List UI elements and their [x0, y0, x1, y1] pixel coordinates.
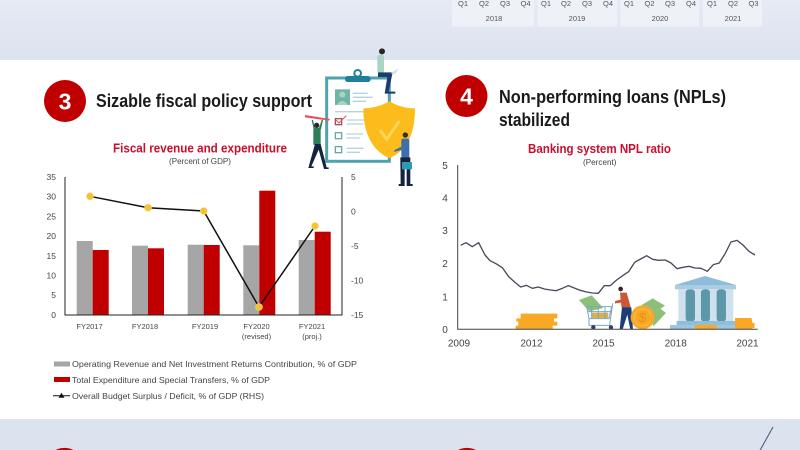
- chart title: Fiscal revenue and expenditure: [113, 142, 287, 156]
- x axis labels: FY2021: [299, 322, 325, 331]
- top band: [0, 0, 800, 60]
- y axis labels: [442, 161, 448, 336]
- chart subtitle: (Percent of GDP): [169, 157, 231, 166]
- left axis labels: [47, 172, 56, 320]
- chart axes: [65, 177, 342, 315]
- legend: [53, 359, 357, 401]
- x axis labels: [76, 322, 325, 341]
- x axis labels: (proj.): [302, 332, 322, 341]
- x axis labels: (revised): [242, 332, 272, 341]
- right axis labels: 0: [351, 206, 356, 216]
- left axis labels: 5: [51, 290, 56, 300]
- right axis labels: -5: [351, 241, 359, 251]
- y axis labels: 5: [442, 161, 448, 172]
- x axis labels: 2012: [520, 338, 543, 350]
- y axis labels: 0: [442, 325, 448, 336]
- heading: section 3: Sizable fiscal policy support: [96, 91, 312, 111]
- y axis labels: 4: [442, 194, 448, 205]
- right axis labels: -15: [351, 310, 364, 320]
- bars: operating revenue: [77, 240, 315, 315]
- line: budget balance: [86, 193, 318, 310]
- illustration: shopper with cart and coin: $: [639, 310, 647, 325]
- x axis labels: FY2019: [192, 322, 218, 331]
- illustration: coin stack left: [516, 314, 557, 329]
- number badge 4: 4: [460, 84, 473, 110]
- illustration: bank building: [670, 276, 740, 329]
- chart: banking system NPL ratio: [442, 142, 759, 350]
- heading: section 4: stabilized: [499, 110, 570, 130]
- x axis labels: 2021: [736, 338, 759, 350]
- number badge 4: [446, 75, 488, 117]
- quarterly axis table: 2021: [725, 14, 741, 23]
- quarterly axis table: 2020: [652, 14, 668, 23]
- legend: Overall Budget Surplus / Deficit, % of GDP (RHS): [72, 391, 264, 401]
- chart title: Banking system NPL ratio: [528, 142, 671, 156]
- x axis labels: FY2020: [243, 322, 270, 331]
- left axis labels: 20: [47, 231, 56, 241]
- left axis labels: 10: [47, 270, 56, 280]
- illustration: coin stack right: [735, 318, 754, 330]
- chart subtitle: (Percent): [583, 158, 617, 167]
- illustration: shopper with cart and coin: [579, 287, 666, 329]
- y axis labels: 3: [442, 226, 448, 237]
- y axis labels: 2: [442, 259, 448, 270]
- x axis labels: 2009: [448, 338, 471, 350]
- right axis labels: [351, 172, 364, 320]
- illustration: clipboard, shield and people: [305, 48, 415, 186]
- x axis labels: FY2018: [132, 322, 158, 331]
- next section illustration stroke: [760, 427, 773, 450]
- legend: Total Expenditure and Special Transfers, % of GDP: [72, 375, 270, 385]
- right axis labels: -10: [351, 276, 364, 286]
- legend: Operating Revenue and Net Investment Returns Contribution, % of GDP: [72, 359, 357, 369]
- number badge 3: 3: [59, 88, 71, 114]
- quarterly axis table: 2018: [486, 14, 502, 23]
- x axis labels: 2015: [592, 338, 615, 350]
- heading: section 4: Non-performing loans (NPLs): [499, 87, 726, 107]
- left axis labels: 30: [47, 192, 56, 202]
- chart axes: [458, 165, 758, 329]
- quarterly axis table: 2019: [569, 14, 585, 23]
- x axis labels: 2018: [665, 338, 687, 350]
- right axis labels: 5: [351, 172, 356, 182]
- bars: total expenditure: [93, 191, 331, 315]
- left axis labels: 25: [47, 211, 56, 221]
- line: NPL ratio: [461, 240, 755, 293]
- x axis labels: FY2017: [76, 322, 103, 331]
- left axis labels: 15: [47, 251, 56, 261]
- x axis labels: [448, 338, 759, 350]
- next section badge, partially visible: [56, 448, 73, 450]
- y axis labels: 1: [442, 292, 448, 304]
- left axis labels: 35: [47, 172, 56, 182]
- bottom band: [0, 419, 800, 450]
- number badge 3: [44, 80, 86, 122]
- heading: section 4: [499, 87, 726, 130]
- quarterly axis table: [452, 0, 762, 26]
- chart: fiscal revenue and expenditure: [47, 142, 364, 401]
- left axis labels: 0: [51, 310, 56, 320]
- next section badge, partially visible: [458, 448, 476, 450]
